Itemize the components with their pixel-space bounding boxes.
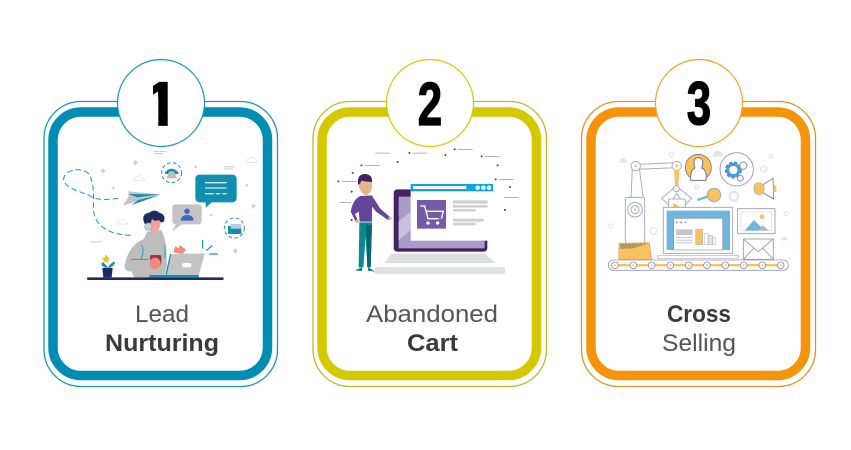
clouds and sparkles: [117, 157, 257, 224]
number circle 2: 2: [418, 71, 442, 139]
label: Abandoned Cart: Cart: [407, 330, 458, 357]
label: Cross Selling: Selling: [662, 330, 736, 357]
label: Abandoned Cart: [366, 301, 498, 357]
number circle 1: [118, 60, 204, 146]
laptop: [385, 254, 495, 263]
laptop: [166, 253, 205, 277]
label: Cross Selling: [662, 301, 736, 357]
robot arm: [625, 161, 681, 243]
illustration: lead nurturing: [64, 151, 257, 280]
person badge: [685, 154, 711, 180]
laptop: [663, 207, 733, 253]
number circle 3: [656, 60, 742, 146]
megaphone: [763, 178, 774, 199]
magnifier: [697, 197, 707, 200]
person: [359, 222, 372, 267]
desk: [87, 277, 224, 280]
browser window: [411, 184, 493, 241]
panel: Lead Nurturing: [44, 60, 278, 386]
gripper and play box: [662, 186, 692, 216]
plant: [102, 268, 113, 277]
gear badge: [720, 153, 753, 186]
number circle 1: 1: [145, 70, 179, 138]
card frame: yellow: [313, 102, 546, 386]
card frame: orange: [582, 102, 816, 386]
person: [124, 230, 167, 277]
panel: Cross Selling: [582, 60, 816, 386]
label: Abandoned Cart: Abandoned: [366, 301, 498, 328]
illustration: cross selling: [608, 151, 788, 270]
number circle 3: 3: [687, 71, 711, 138]
envelope: [743, 239, 773, 259]
label: Cross Selling: Cross: [667, 301, 731, 328]
label: Lead Nurturing: [105, 301, 219, 357]
panel: Abandoned Cart: [313, 60, 546, 386]
illustration: abandoned cart: [337, 148, 519, 274]
picture: [738, 209, 775, 234]
label: Lead Nurturing: Nurturing: [105, 330, 219, 357]
card frame: blue: [44, 102, 278, 386]
conveyor: [608, 260, 788, 270]
label: Lead Nurturing: Lead: [135, 301, 189, 328]
number circle 2: [386, 60, 474, 146]
